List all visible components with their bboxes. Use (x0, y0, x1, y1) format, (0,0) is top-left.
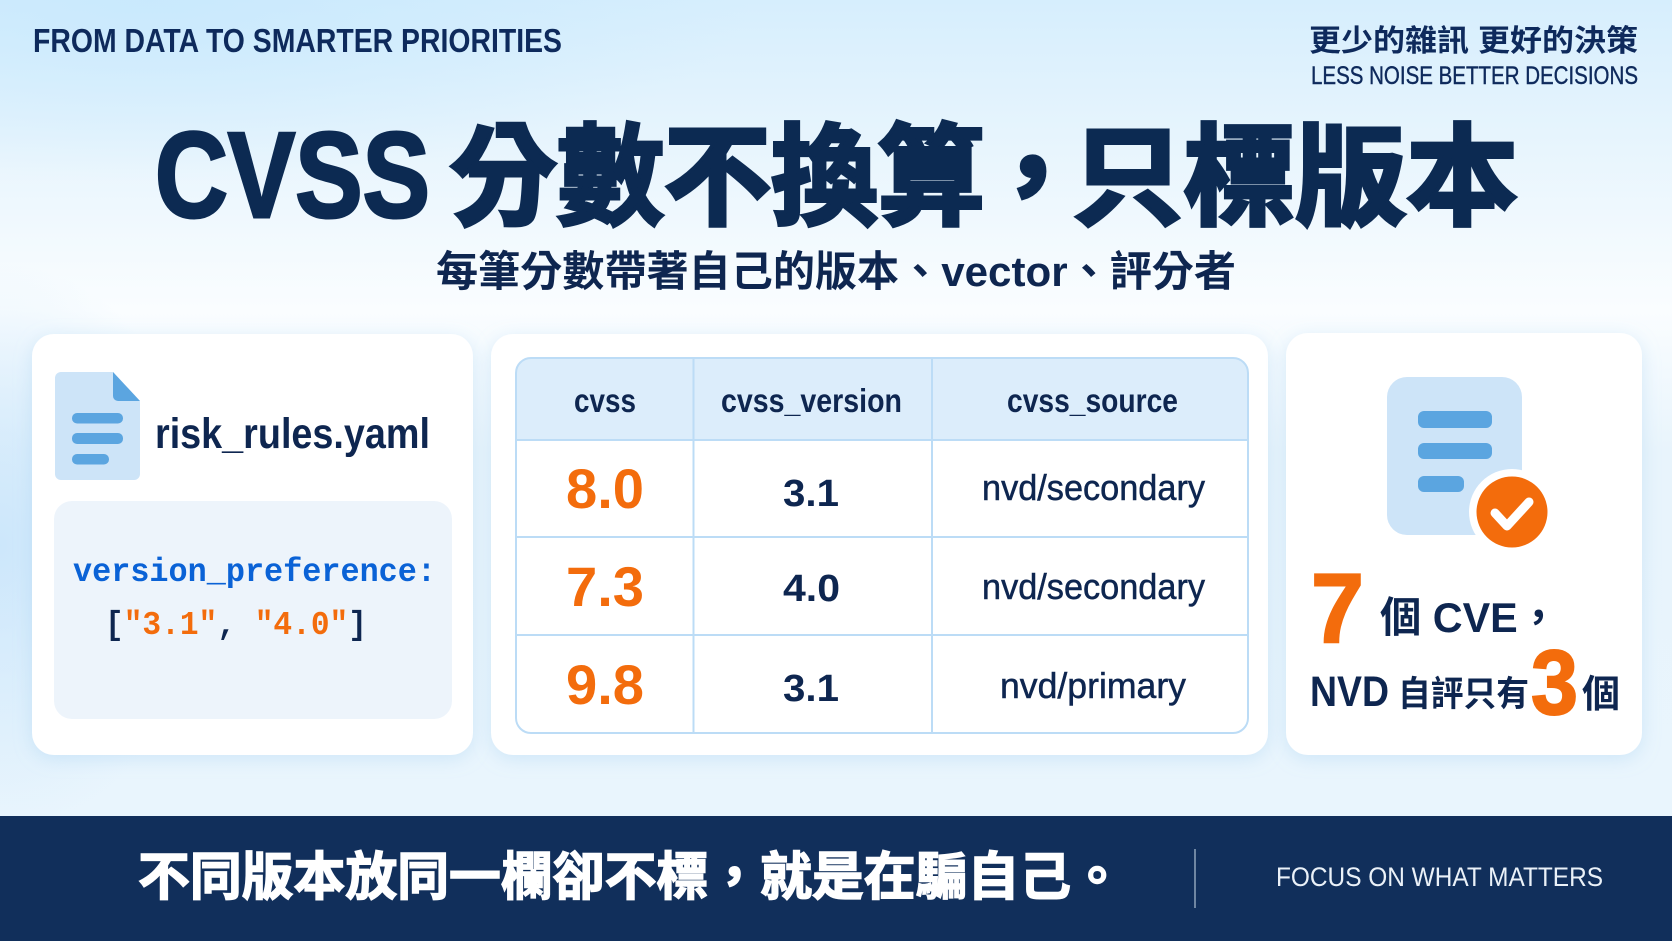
row: 8.0 / 3.1 / nvd/secondary: 8.0 (566, 457, 644, 520)
panel: risk_rules.yaml config (32, 334, 473, 755)
title: ， (977, 117, 1087, 240)
file name: risk_rules.yaml (155, 410, 430, 458)
row: 9.8 / 3.1 / nvd/primary (566, 653, 1186, 716)
row: 7.3 / 4.0 / nvd/secondary (566, 555, 1205, 618)
row: 7.3 / 4.0 / nvd/secondary: 7.3 (566, 555, 644, 618)
stat line: NVD 3 (1310, 632, 1620, 734)
row: 9.8 / 3.1 / nvd/primary: nvd/primary (1000, 665, 1186, 706)
footer statement: 不同版本放同一欄卻不標，就是在騙自己。 (138, 849, 1123, 907)
panel: CVE count (1286, 333, 1642, 755)
row: 9.8 / 3.1 / nvd/primary: 9.8 (566, 653, 644, 716)
table header: cvss_source (1007, 382, 1178, 419)
stat line: NVD 3: 個 (1582, 674, 1620, 716)
stat line: NVD 3: 自評只有 (1398, 675, 1529, 714)
header tagline right (1309, 25, 1638, 90)
row: 8.0 / 3.1 / nvd/secondary: nvd/secondary (982, 467, 1205, 508)
Chinese tagline: 更少的雜訊 更好的決策 (1309, 25, 1638, 58)
stat line: 7 CVE (1311, 553, 1559, 663)
title (155, 107, 1518, 243)
table grid (516, 358, 1248, 733)
row: 8.0 / 3.1 / nvd/secondary (566, 457, 1205, 520)
panel: CVSS table (491, 334, 1268, 755)
code key: version_preference: (73, 554, 436, 591)
row: 9.8 / 3.1 / nvd/primary: 3.1 (783, 668, 839, 710)
table header: cvss_version (721, 382, 902, 419)
row: 8.0 / 3.1 / nvd/secondary: 3.1 (783, 473, 839, 515)
row: 7.3 / 4.0 / nvd/secondary: 4.0 (783, 568, 840, 610)
table header (574, 382, 1178, 419)
title: 分數不換算 (450, 117, 985, 240)
table header: cvss (574, 382, 636, 419)
stat line: NVD 3: NVD (1310, 668, 1389, 716)
header tagline left: FROM DATA TO SMARTER PRIORITIES (33, 22, 562, 59)
title: CVSS (155, 107, 430, 243)
stat line: 7 CVE: 7 (1311, 553, 1364, 663)
title: 只標版本 (1072, 117, 1518, 240)
subtitle: 每筆分數帶著自己的版本、vector、評分者 (436, 248, 1236, 295)
code value: ["3.1", "4.0"] (105, 607, 367, 644)
code block (54, 501, 452, 719)
icon: document with check (1387, 377, 1555, 555)
icon: file document (55, 372, 140, 480)
stat line: 7 CVE: 個 CVE， (1380, 594, 1559, 641)
stat line: NVD 3: 3 (1531, 632, 1578, 734)
footer slogan: FOCUS ON WHAT MATTERS (1276, 862, 1603, 892)
footer bar (0, 816, 1672, 941)
row: 7.3 / 4.0 / nvd/secondary: nvd/secondary (982, 566, 1205, 607)
